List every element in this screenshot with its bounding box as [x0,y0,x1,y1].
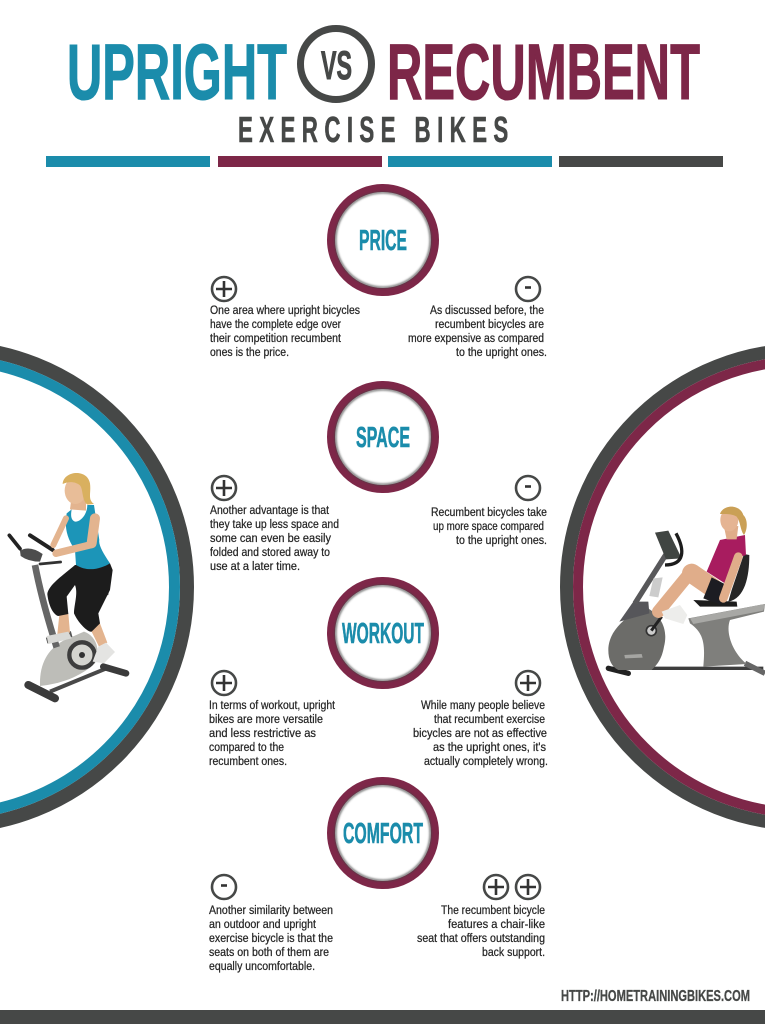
icon: plus [212,671,236,695]
text: recumbent workout: as the upright ones, it's [433,740,546,754]
text: recumbent workout: that recumbent exercise [434,712,545,726]
rider [658,507,747,624]
text: upright space: Another advantage is that [210,503,329,517]
icon: plus [516,671,540,695]
text: recumbent comfort: The recumbent bicycle [441,903,545,917]
text: recumbent price [408,303,547,359]
illustration: woman on upright bike [9,473,126,698]
heading circle: workout: WORKOUT [342,618,424,650]
text: upright comfort: an outdoor and upright [209,917,316,931]
text: upright workout: compared to the [209,740,284,754]
icon: plus [484,875,508,899]
text: recumbent space: up more space compared [433,519,544,533]
text: recumbent comfort: seat that offers outstanding [417,931,545,945]
illustration: woman on recumbent bike [608,507,765,673]
text: recumbent comfort: features a chair-like [448,917,545,931]
text: upright price: have the complete edge over [210,317,341,331]
heading circle: space [331,385,435,489]
text: upright space: folded and stored away to [210,545,330,559]
icon: plus [516,875,540,899]
text: recumbent space: to the upright ones. [456,533,547,547]
rider [47,473,115,663]
panel: space [210,385,547,573]
text: upright price [210,303,360,359]
vs badge: VS [321,44,352,88]
text: upright workout: and less restrictive as [209,726,316,740]
text: recumbent comfort [417,903,545,959]
text: recumbent workout: While many people believe [421,698,545,712]
bike frame and feet [9,535,126,698]
text: recumbent price: more expensive as compared [408,331,544,345]
icon: minus [212,875,236,899]
text: upright price: ones is the price. [210,345,289,359]
text: upright comfort: exercise bicycle is that the [209,931,333,945]
text: upright workout: In terms of workout, upright [209,698,335,712]
text: upright comfort: Another similarity between [209,903,333,917]
text: recumbent price: recumbent bicycles are [435,317,544,331]
text: upright space: they take up less space and [210,517,339,531]
heading circle: workout [331,581,435,685]
heading circle: price [331,188,435,292]
text: upright comfort [209,903,333,973]
heading circle: comfort [331,781,435,885]
text: upright comfort: equally uncomfortable. [209,959,315,973]
title: upright vs recumbent [67,27,700,116]
icon: plus [212,277,236,301]
text: recumbent comfort: back support. [482,945,545,959]
text: upright space: use at a later time. [210,559,300,573]
panel: comfort [209,781,545,973]
text: recumbent space: Recumbent bicycles take [431,505,547,519]
panel: price [210,188,547,359]
text: recumbent price: As discussed before, the [430,303,544,317]
text: upright workout [209,698,335,768]
text: upright workout: recumbent ones. [209,754,287,768]
heading circle: space: SPACE [356,422,410,454]
text: upright price: One area where upright bicycles [210,303,360,317]
panel: workout [209,581,548,768]
bike frame [608,531,765,673]
icon: minus [516,476,540,500]
text: upright comfort: seats on both of them are [209,945,329,959]
subtitle: EXERCISE BIKES [238,111,508,150]
text: recumbent workout [413,698,548,768]
vs badge [300,28,372,100]
text: upright price: their competition recumbent [210,331,341,345]
title word: upright: UPRIGHT [67,27,287,116]
heading circle: comfort: COMFORT [343,818,423,850]
right ring: recumbent [566,350,765,824]
icon: plus [212,476,236,500]
text: recumbent price: to the upright ones. [456,345,547,359]
left ring: upright [0,347,187,827]
text: upright space: some can even be easily [210,531,332,545]
footer bar [0,1010,765,1024]
header colour bars [46,156,723,167]
text: recumbent workout: actually completely wrong. [424,754,548,768]
text: recumbent space [431,505,547,547]
text: upright space [210,503,339,573]
heading circle: price: PRICE [359,225,407,257]
text: recumbent workout: bicycles are not as effective [413,726,547,740]
text: upright workout: bikes are more versatile [209,712,323,726]
icon: minus [516,277,540,301]
